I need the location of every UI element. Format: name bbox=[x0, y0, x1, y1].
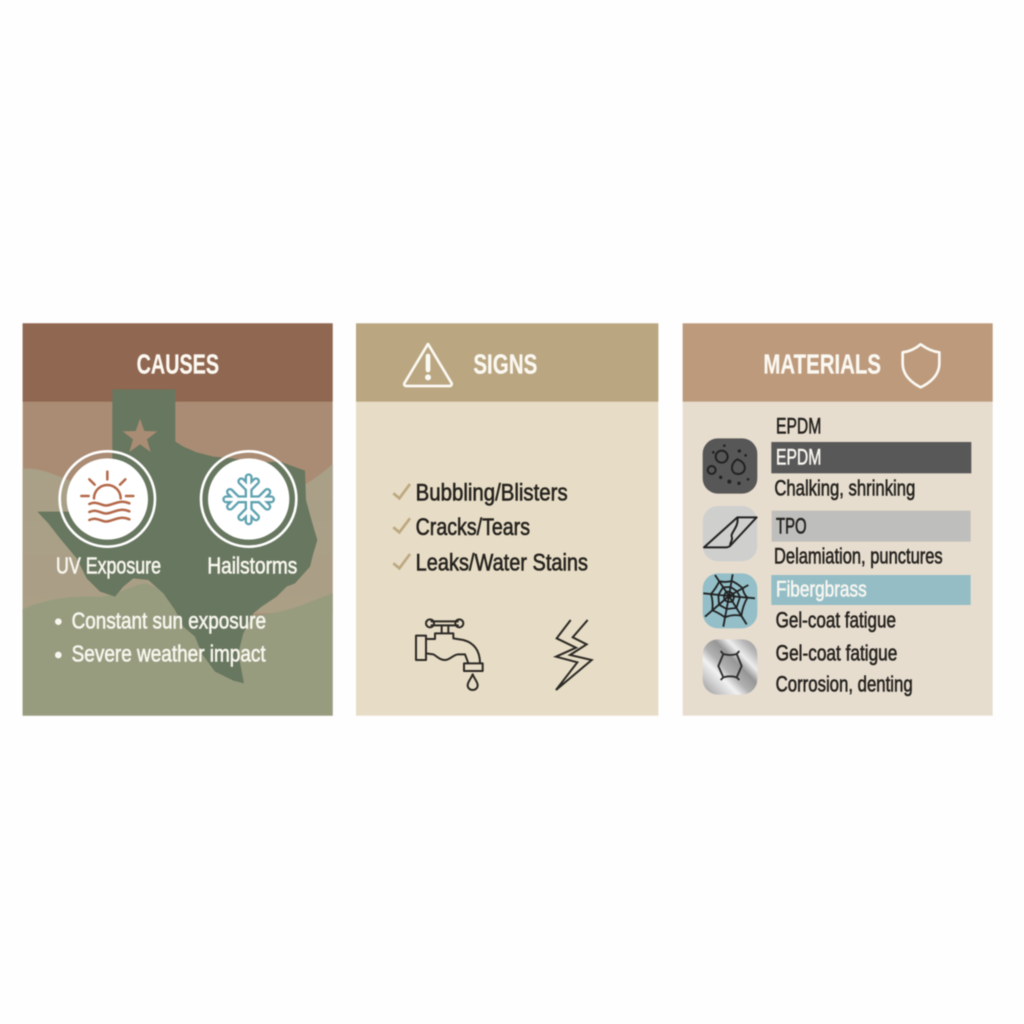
icon: EPDM chalking texture bbox=[703, 438, 757, 494]
map of Texas bbox=[37, 389, 317, 683]
bullet list bbox=[55, 607, 266, 667]
panel: materials bbox=[683, 323, 993, 716]
bar: fiberglass: Fibergbrass bbox=[776, 577, 867, 602]
bar: TPO: TPO bbox=[776, 513, 807, 538]
icon: metal dent bbox=[703, 639, 757, 695]
panel: signs bbox=[356, 323, 658, 716]
causes header band bbox=[23, 323, 333, 402]
text: metal line two: Corrosion, denting bbox=[776, 672, 913, 697]
checklist: Cracks/Tears bbox=[416, 514, 530, 541]
checklist: Bubbling/Blisters bbox=[416, 480, 568, 507]
text: fiberglass issues: Gel-coat fatigue bbox=[776, 608, 896, 633]
icon: shield bbox=[903, 344, 939, 387]
star bbox=[123, 419, 157, 452]
icon: warning triangle bbox=[404, 344, 452, 386]
icon: TPO peeling sheet bbox=[703, 506, 757, 561]
text: TPO issues: Delamiation, punctures bbox=[774, 543, 943, 568]
label: hailstorms: Hailstorms bbox=[207, 552, 297, 578]
heading: materials: MATERIALS bbox=[763, 348, 881, 379]
icon: UV sun and waves bbox=[60, 451, 155, 547]
materials background bbox=[683, 323, 993, 716]
causes background bbox=[23, 323, 333, 716]
label: UV exposure: UV Exposure bbox=[56, 552, 161, 578]
icon: fiberglass crack web bbox=[703, 573, 757, 628]
icon: lightning crack bbox=[556, 620, 592, 690]
heading: signs: SIGNS bbox=[473, 348, 537, 379]
signs header band bbox=[356, 323, 658, 402]
icon: dripping faucet bbox=[416, 619, 483, 690]
text: metal line one: Gel-coat fatigue bbox=[776, 641, 897, 666]
bar: fiberglass bbox=[771, 575, 971, 605]
checklist: Leaks/Water Stains bbox=[416, 550, 588, 577]
bullet list: Constant sun exposure bbox=[72, 607, 266, 633]
text: EPDM issues: Chalking, shrinking bbox=[774, 476, 915, 501]
signs background bbox=[356, 323, 658, 716]
bar: EPDM bbox=[771, 442, 971, 473]
heading: causes: CAUSES bbox=[137, 348, 219, 379]
panel: causes bbox=[23, 323, 333, 716]
checklist bbox=[393, 480, 588, 577]
materials header band bbox=[683, 323, 993, 402]
bullet list: Severe weather impact bbox=[72, 641, 266, 667]
icon: hail snowflake bbox=[201, 451, 296, 547]
bar: TPO bbox=[772, 511, 971, 542]
bar: EPDM: EPDM bbox=[776, 445, 821, 470]
label: EPDM title: EPDM bbox=[776, 413, 821, 438]
